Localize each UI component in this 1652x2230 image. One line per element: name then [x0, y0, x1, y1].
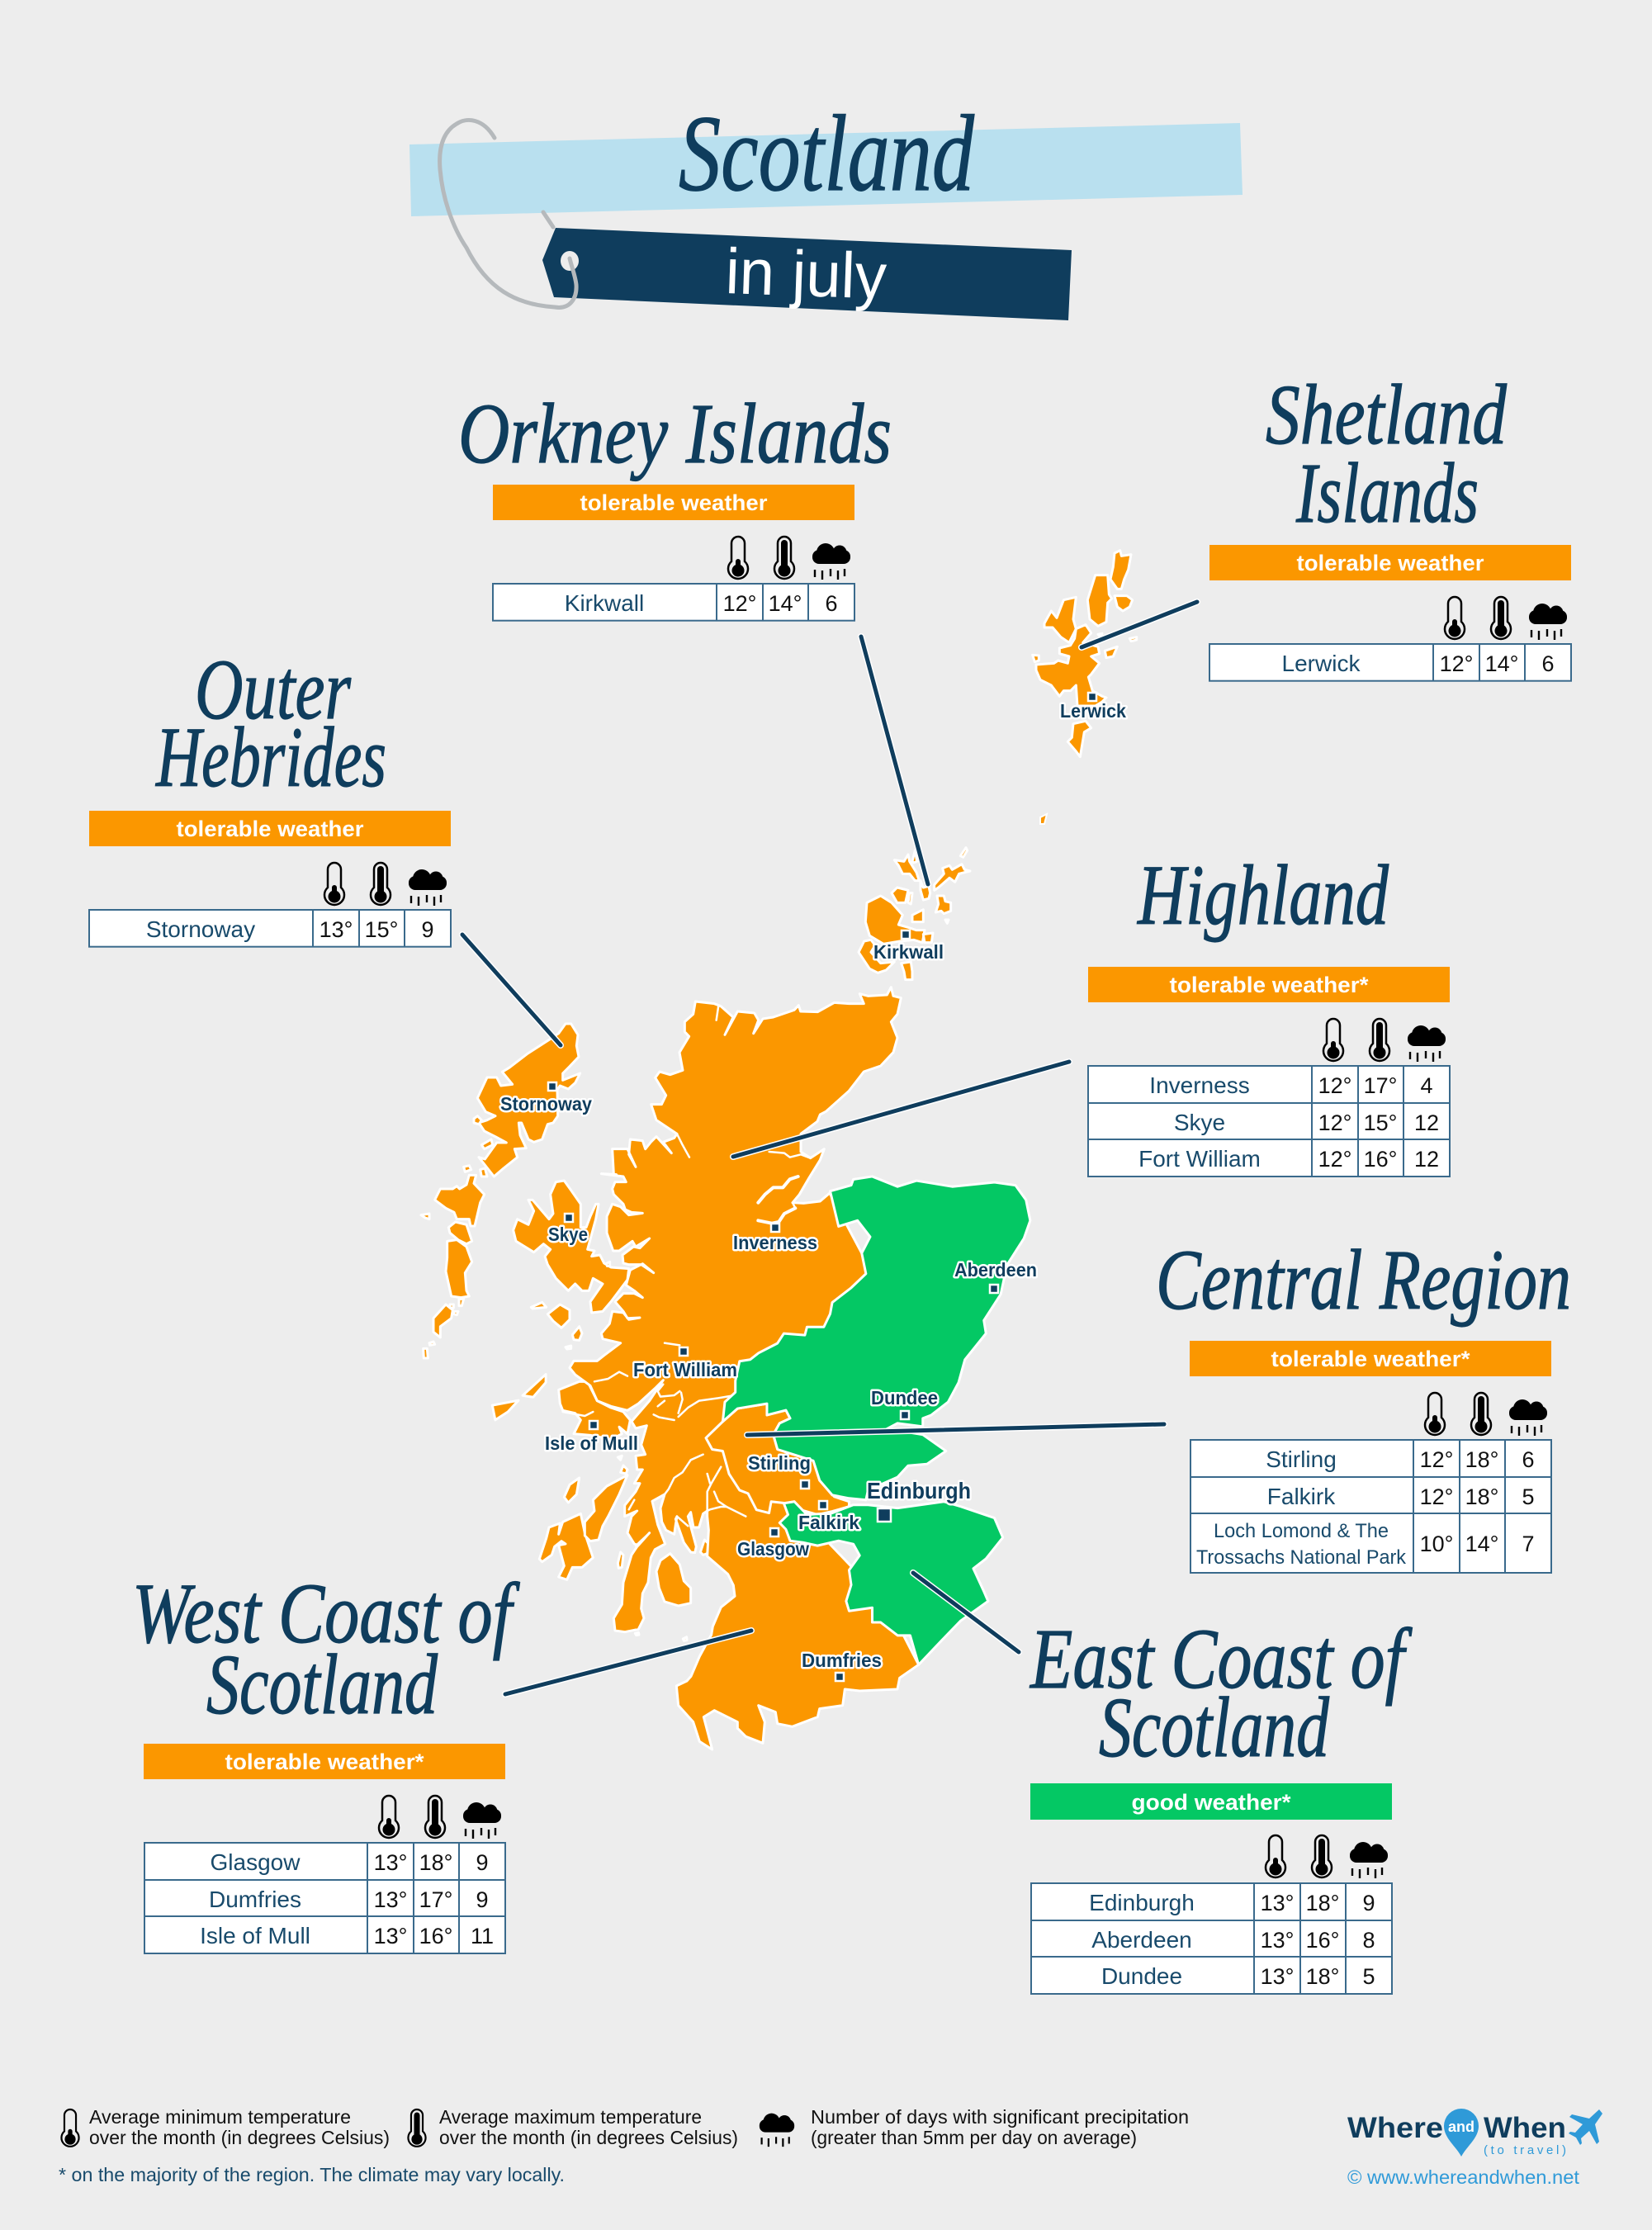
weather table: Central Region: 14° — [1465, 1532, 1498, 1556]
weather table: Central Region: 6 — [1522, 1447, 1535, 1472]
weather table: East Coast: 5 — [1362, 1964, 1375, 1989]
weather table: West Coast: Isle of Mull — [200, 1923, 310, 1948]
weather table: Central Region: 12° — [1420, 1484, 1453, 1509]
logo wordmark: Where — [1347, 2112, 1443, 2144]
weather table: Orkney: 14° — [769, 591, 802, 616]
region: Highland and West Coast mainland — [570, 987, 919, 1749]
weather table: Orkney: tolerable weather — [580, 490, 768, 515]
city: Stirling — [748, 1452, 811, 1489]
city: Aberdeen: Aberdeen — [954, 1259, 1037, 1281]
heading: Shetland Islands: Islands — [1295, 446, 1479, 541]
legend — [59, 2106, 1189, 2185]
heading: East Coast of Scotland — [1029, 1612, 1413, 1775]
panel: Central Region — [1156, 1233, 1571, 1573]
connector: West Coast — [505, 1631, 751, 1694]
city: Dundee: Dundee — [871, 1387, 938, 1409]
panel: Outer Hebrides — [89, 642, 451, 947]
sea lochs and inlets — [563, 1006, 811, 1546]
legend: precipitation days: (greater than 5mm per day on average) — [811, 2127, 1137, 2148]
city: Fort William: Fort William — [633, 1359, 737, 1380]
weather table: Highland: Fort William — [1138, 1146, 1261, 1172]
weather table: Outer Hebrides: tolerable weather — [177, 817, 364, 841]
weather table: Central Region: 18° — [1465, 1484, 1498, 1509]
weather table: West Coast: 9 — [476, 1850, 489, 1875]
weather table: Shetland: 14° — [1485, 651, 1518, 676]
subtitle: in july: in july — [724, 234, 888, 313]
weather table: Outer Hebrides: 15° — [365, 917, 398, 942]
connector: Shetland — [1082, 602, 1197, 647]
weather table: Shetland: tolerable weather — [1296, 551, 1484, 575]
city: Lerwick: Lerwick — [1060, 700, 1126, 722]
heading: Highland: Highland — [1136, 848, 1389, 943]
logo: Where and When — [1347, 2109, 1602, 2188]
weather table: West Coast: 11 — [471, 1924, 494, 1948]
city: Stornoway: Stornoway — [500, 1093, 592, 1115]
weather table: East Coast: good weather* — [1131, 1790, 1291, 1815]
heading: Shetland Islands — [1266, 367, 1508, 541]
weather table: East Coast: 9 — [1362, 1891, 1375, 1915]
city: Glasgow: Glasgow — [737, 1538, 809, 1560]
heading: East Coast of Scotland: Scotland — [1099, 1680, 1330, 1775]
weather table: West Coast: 13° — [374, 1924, 407, 1948]
weather table: East Coast: Edinburgh — [1089, 1890, 1195, 1915]
connector: Outer Hebrides — [462, 935, 561, 1045]
heading: Outer Hebrides: Hebrides — [155, 710, 386, 805]
plane icon — [1569, 2109, 1602, 2145]
panel: Highland — [1088, 848, 1450, 1177]
title: Scotland: Scotland — [679, 92, 975, 214]
string loop — [440, 121, 576, 307]
heading: Orkney Islands: Orkney Islands — [458, 386, 892, 481]
weather table: Highland: 12° — [1318, 1110, 1351, 1135]
city: Isle of Mull: Isle of Mull — [545, 1432, 638, 1454]
legend: maximum temperature: Average maximum temperature — [439, 2106, 702, 2128]
legend: precipitation days: Number of days with significant precipitation — [811, 2106, 1189, 2128]
weather table: West Coast: 18° — [419, 1850, 452, 1875]
weather table: Central Region: Stirling — [1266, 1446, 1337, 1472]
weather table: West Coast: 16° — [419, 1924, 452, 1948]
weather table: Highland: 12° — [1318, 1073, 1351, 1098]
weather table: Shetland — [1209, 545, 1571, 681]
city: Kirkwall: Kirkwall — [873, 941, 944, 963]
heading: Outer Hebrides: Outer — [195, 642, 351, 737]
city: Isle of Mull — [545, 1421, 638, 1454]
Inner Hebrides map — [539, 1381, 708, 1641]
city: Stirling: Stirling — [748, 1452, 811, 1474]
title band — [409, 123, 1243, 216]
heading: West Coast of Scotland: Scotland — [206, 1637, 438, 1732]
city: Falkirk — [798, 1501, 859, 1533]
city: Skye: Skye — [548, 1224, 588, 1245]
city: Edinburgh — [867, 1478, 971, 1522]
weather table: Highland — [1088, 967, 1450, 1177]
weather table: Outer Hebrides — [89, 811, 451, 947]
city: Inverness — [733, 1224, 817, 1253]
connector: East Coast — [913, 1573, 1019, 1652]
city: Dumfries — [802, 1650, 882, 1681]
Orkney Islands map — [859, 848, 970, 980]
weather table: Highland: tolerable weather* — [1169, 973, 1369, 997]
weather table: West Coast: tolerable weather* — [225, 1749, 424, 1774]
weather table: Central Region: 12° — [1420, 1447, 1453, 1472]
logo wordmark — [1347, 2112, 1566, 2157]
weather table: East Coast: 13° — [1261, 1964, 1294, 1989]
pin icon — [1444, 2109, 1479, 2157]
weather table: Highland: 12 — [1414, 1110, 1439, 1135]
weather table: West Coast: 17° — [419, 1887, 452, 1912]
city: Fort William — [633, 1347, 737, 1380]
weather table: East Coast: 13° — [1261, 1928, 1294, 1953]
city: Edinburgh: Edinburgh — [867, 1478, 971, 1503]
city: Aberdeen — [954, 1259, 1037, 1293]
logo wordmark: (to travel) — [1484, 2143, 1566, 2157]
city: Skye — [548, 1214, 588, 1245]
weather table: West Coast: 9 — [476, 1887, 489, 1912]
weather table: Outer Hebrides: Stornoway — [146, 916, 255, 942]
weather table: East Coast: 13° — [1261, 1891, 1294, 1915]
weather table: Central Region: 7 — [1522, 1532, 1535, 1556]
connector: Orkney — [861, 637, 928, 884]
heading: Outer Hebrides — [155, 642, 386, 805]
weather table: Highland: 16° — [1364, 1147, 1397, 1172]
weather table: East Coast: 18° — [1306, 1964, 1339, 1989]
legend: minimum temperature: over the month (in degrees Celsius) — [89, 2127, 390, 2148]
tag: in july — [542, 228, 1072, 320]
weather table: Orkney: Kirkwall — [565, 590, 644, 616]
city: Falkirk: Falkirk — [798, 1512, 859, 1533]
panel: Shetland Islands — [1209, 367, 1571, 681]
legend: precipitation days — [760, 2106, 1189, 2148]
Fair Isle — [1040, 814, 1047, 824]
weather table: Central Region — [1190, 1341, 1551, 1573]
map of Scotland — [421, 551, 1197, 1749]
weather table: Orkney: 6 — [825, 591, 838, 616]
weather table: Orkney — [493, 485, 854, 621]
weather table: West Coast: 13° — [374, 1850, 407, 1875]
city: Stornoway — [500, 1082, 592, 1115]
weather table: East Coast: Aberdeen — [1091, 1927, 1192, 1953]
heading: East Coast of Scotland: East Coast of — [1029, 1612, 1413, 1707]
heading: West Coast of Scotland — [132, 1566, 520, 1732]
weather table: Highland: 12 — [1414, 1147, 1439, 1172]
weather table: Highland: 17° — [1364, 1073, 1397, 1098]
region: Central Region — [706, 1404, 849, 1515]
weather table: Orkney: 12° — [723, 591, 756, 616]
connector: Highland — [733, 1062, 1069, 1157]
city: Dundee — [871, 1387, 938, 1419]
city: Kirkwall — [873, 930, 944, 963]
heading: West Coast of Scotland: West Coast of — [132, 1566, 520, 1661]
city: Glasgow — [737, 1528, 809, 1560]
weather table: Shetland: Lerwick — [1282, 651, 1361, 676]
weather table: Central Region: 5 — [1522, 1484, 1535, 1509]
weather table: Outer Hebrides: 9 — [421, 917, 434, 942]
weather table: Central Region: Falkirk — [1267, 1484, 1336, 1509]
city: Inverness: Inverness — [733, 1232, 817, 1253]
weather table: East Coast — [1030, 1783, 1392, 1994]
website link: © www.whereandwhen.net — [1347, 2166, 1580, 2188]
Shetland Islands map — [1033, 551, 1137, 757]
weather table: Highland: 12° — [1318, 1147, 1351, 1172]
logo wordmark: and — [1448, 2119, 1474, 2135]
weather table: Outer Hebrides: 13° — [320, 917, 353, 942]
weather table: East Coast: 16° — [1306, 1928, 1339, 1953]
weather table: Central Region: Trossachs National Park — [1196, 1546, 1407, 1569]
weather table: Central Region: 10° — [1420, 1532, 1453, 1556]
legend: minimum temperature — [61, 2106, 390, 2148]
connector: Central — [747, 1424, 1164, 1435]
panel: West Coast of Scotland — [132, 1566, 520, 1953]
footnote: * on the majority of the region. The climate may vary locally. — [59, 2164, 565, 2185]
tag hole — [561, 251, 579, 271]
legend: minimum temperature: Average minimum temperature — [89, 2106, 351, 2128]
region: East Coast — [722, 1177, 1030, 1664]
weather table: West Coast — [144, 1744, 505, 1953]
weather table: West Coast: 13° — [374, 1887, 407, 1912]
Outer Hebrides and Skye map — [421, 1024, 629, 1358]
weather table: West Coast: Glasgow — [211, 1849, 301, 1875]
weather table: Highland: Inverness — [1149, 1072, 1250, 1098]
weather table: Shetland: 12° — [1440, 651, 1473, 676]
weather table: Highland: 4 — [1420, 1073, 1433, 1098]
logo wordmark: When — [1484, 2112, 1566, 2144]
weather table: Highland: Skye — [1174, 1110, 1225, 1135]
weather table: East Coast: 18° — [1306, 1891, 1339, 1915]
legend: maximum temperature — [408, 2106, 738, 2148]
weather table: Highland: 15° — [1364, 1110, 1397, 1135]
panel: East Coast of Scotland — [1029, 1612, 1413, 1994]
Coll and Tiree map — [492, 1375, 546, 1420]
heading: Shetland Islands: Shetland — [1266, 367, 1508, 462]
weather table: Central Region: Loch Lomond & The — [1214, 1520, 1389, 1542]
weather table: East Coast: Dundee — [1101, 1963, 1182, 1989]
weather table: Central Region: tolerable weather* — [1271, 1347, 1470, 1371]
weather table: Shetland: 6 — [1541, 651, 1555, 676]
weather table: Central Region: 18° — [1465, 1447, 1498, 1472]
city: Dumfries: Dumfries — [802, 1650, 882, 1671]
panel: Orkney Islands — [458, 386, 892, 621]
weather table: East Coast: 8 — [1362, 1928, 1375, 1953]
legend: maximum temperature: over the month (in degrees Celsius) — [439, 2127, 738, 2148]
title block — [409, 92, 1243, 320]
weather table: West Coast: Dumfries — [209, 1887, 301, 1912]
